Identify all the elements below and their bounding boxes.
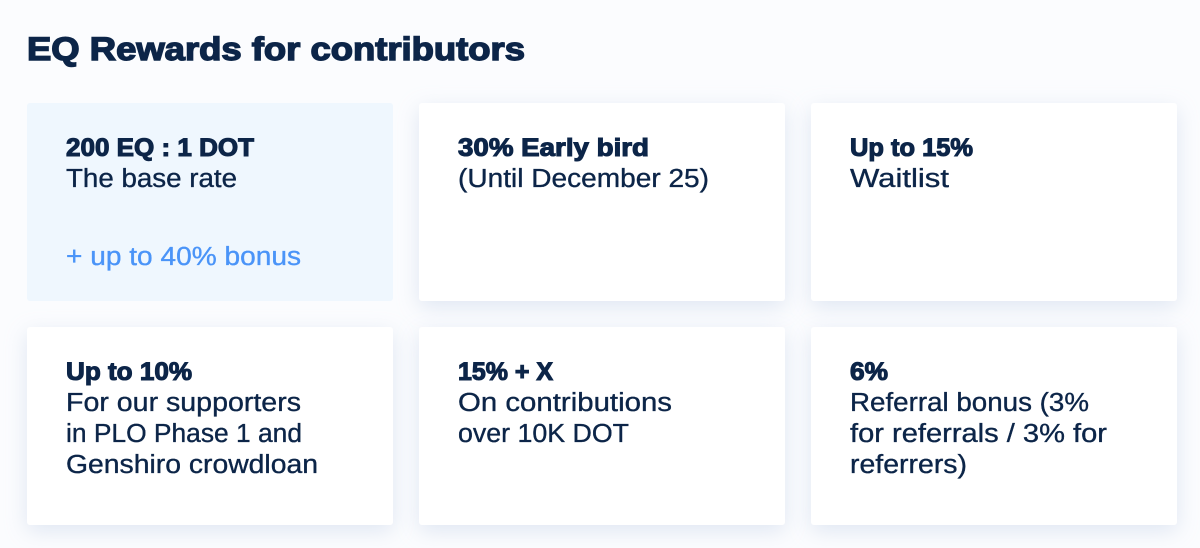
panel: supporters: Up to 10% [66,358,192,386]
title: EQ Rewards for contributors [27,31,525,67]
panel: large contributions: 15% + X [458,358,553,386]
panel: waitlist [811,103,1177,301]
panel: waitlist: Waitlist [850,165,949,193]
panel: supporters [27,327,393,525]
panel: large contributions: over 10K DOT [458,420,629,448]
panel: supporters: For our supporters [66,389,301,417]
panel: large contributions: On contributions [458,389,672,417]
panel: early bird [419,103,785,301]
panel: base rate: 200 EQ : 1 DOT [66,134,254,162]
panel: supporters: Genshiro crowdloan [66,451,318,479]
panel: referral bonus: 6% [850,358,888,386]
panel: waitlist: Up to 15% [850,134,973,162]
panel: base rate [27,103,393,301]
panel: early bird: (Until December 25) [458,165,709,193]
panel: base rate: The base rate [66,165,237,193]
panel: referral bonus [811,327,1177,525]
panel: referral bonus: for referrals / 3% for [850,420,1108,448]
panel: referral bonus: Referral bonus (3% [850,389,1089,417]
panel: referral bonus: referrers) [850,451,967,479]
panel: supporters: in PLO Phase 1 and [66,420,302,448]
panel: large contributions [419,327,785,525]
panel: base rate: + up to 40% bonus [66,243,301,271]
panel: early bird: 30% Early bird [458,134,649,162]
